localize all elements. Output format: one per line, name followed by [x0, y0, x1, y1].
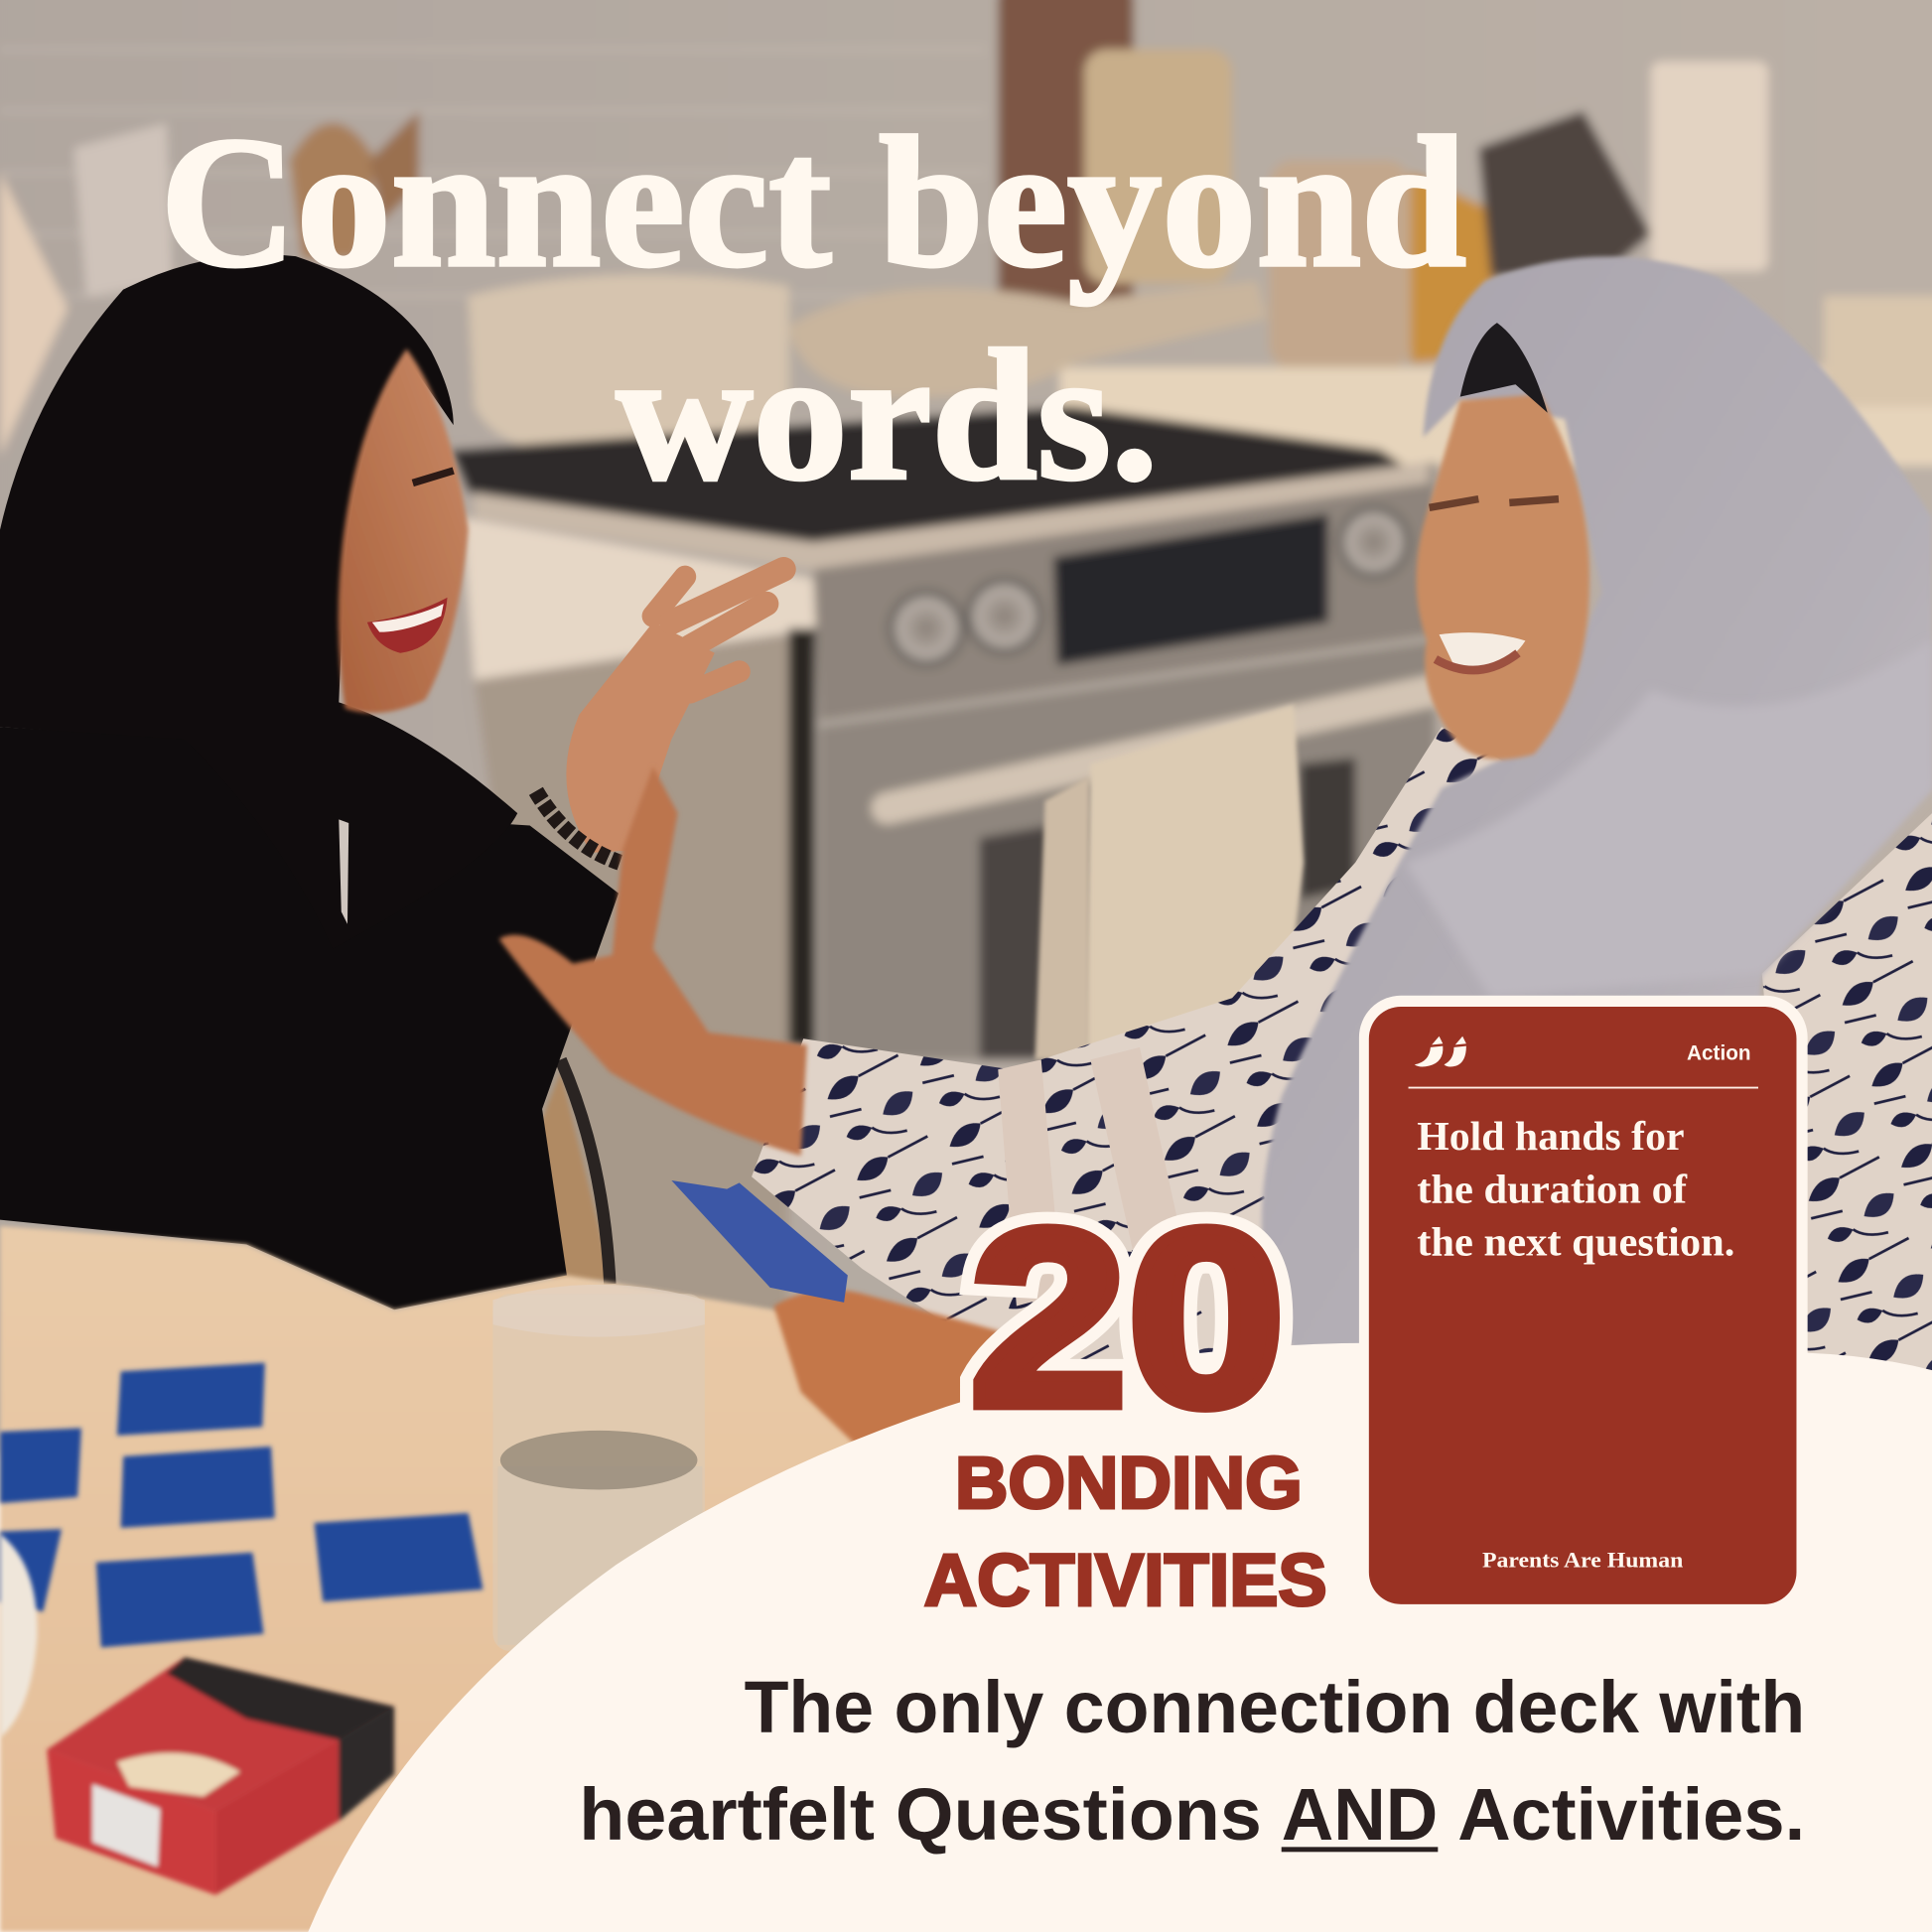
title	[160, 98, 1466, 519]
subheading: bonding activities	[924, 1442, 1327, 1621]
hair	[0, 254, 517, 949]
hand holding cards	[671, 1180, 1023, 1453]
cream curved panel	[308, 1343, 1932, 1932]
oven control panel	[813, 462, 1436, 721]
card prompt text: the next question.	[1417, 1220, 1734, 1265]
tagline: The only connection deck with	[745, 1666, 1805, 1748]
kitchen background	[0, 0, 1932, 1453]
scarf	[1262, 256, 1932, 1368]
face	[339, 348, 469, 713]
pan	[788, 281, 1267, 397]
title: words.	[617, 312, 1159, 519]
icon: two chili peppers	[1415, 1036, 1466, 1067]
big number 20: 20	[970, 1177, 1285, 1458]
counter top	[1059, 367, 1932, 466]
big number 20: 20	[970, 1177, 1285, 1458]
hand raised	[566, 569, 783, 853]
tagline: Activities.	[1457, 1773, 1805, 1856]
oven door	[819, 640, 1436, 1059]
left cabinet	[462, 517, 816, 680]
tagline: AND	[1282, 1773, 1438, 1856]
torso	[0, 727, 619, 1310]
shirt collar	[339, 819, 348, 924]
blouse	[752, 727, 1601, 1380]
woman left	[0, 254, 783, 1310]
title: Connect beyond	[160, 98, 1466, 306]
product box	[47, 1657, 394, 1895]
bowl	[0, 1534, 37, 1737]
subheading: bonding activities: BONDING	[955, 1442, 1303, 1524]
woman right	[752, 256, 1932, 1392]
bracelet	[536, 791, 620, 863]
card: action prompt	[1359, 996, 1808, 1615]
card brand name: Parents Are Human	[1482, 1548, 1684, 1573]
glass of water	[492, 1285, 705, 1651]
card prompt text: the duration of	[1417, 1167, 1688, 1211]
high-five hand and forearm	[499, 766, 807, 1156]
pot	[469, 274, 788, 459]
face	[1417, 394, 1589, 759]
towel	[1084, 705, 1304, 1059]
subheading: bonding activities: ACTIVITIES	[924, 1539, 1327, 1621]
stove top	[450, 407, 1417, 542]
tagline: heartfelt Questions	[579, 1773, 1262, 1856]
card category label: Action	[1687, 1041, 1751, 1064]
chair	[517, 1072, 613, 1282]
card prompt text	[1417, 1114, 1734, 1265]
table	[0, 1226, 888, 1932]
cards on table	[0, 1363, 483, 1647]
tagline	[579, 1666, 1805, 1856]
card prompt text: Hold hands for	[1417, 1114, 1685, 1159]
